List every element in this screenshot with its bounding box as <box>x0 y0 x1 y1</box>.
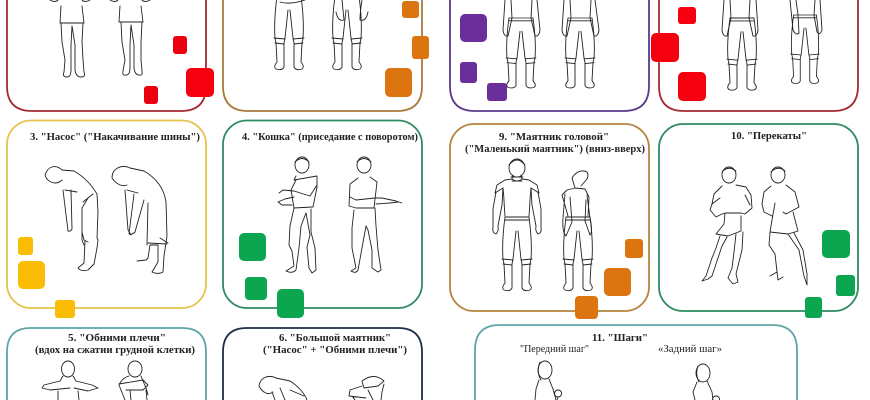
figures: squatting with turn <box>278 157 402 273</box>
decorative squares <box>385 1 429 97</box>
heading: exercise 6: 6. "Большой маятник" <box>279 333 391 344</box>
panel: second top exercise (tan) <box>223 0 429 111</box>
figures: standing men <box>503 0 599 88</box>
figures: bending hug <box>259 376 384 400</box>
decorative squares <box>239 233 304 318</box>
heading: exercise 9 <box>465 132 645 155</box>
figures: standing legs <box>274 0 368 70</box>
panel: exercise 3 pump <box>7 120 206 318</box>
heading: exercise 5: 5. "Обними плечи" <box>68 333 166 344</box>
panel: exercise 11 steps <box>475 325 797 400</box>
panel: exercise 5 hug shoulders <box>7 328 206 400</box>
panel: third top exercise (purple) <box>450 0 649 111</box>
heading: exercise 6 <box>263 333 408 356</box>
heading: exercise 4: 4. "Кошка" (приседание с поворотом) <box>242 132 418 143</box>
heading: exercise 6: ("Насос" + "Обними плечи") <box>263 345 408 356</box>
figures: bent forward men <box>45 166 168 274</box>
figures: rolls <box>702 167 807 285</box>
decorative squares <box>575 239 643 319</box>
heading: exercise 5: (вдох на сжатии грудной клетки) <box>35 345 196 356</box>
heading: exercise 9: ("Маленький маятник") (вниз-вверх) <box>465 144 645 155</box>
figures: head tilt <box>493 159 593 291</box>
label: back step: «Задний шаг» <box>658 344 722 355</box>
panel: fourth top exercise (red) <box>651 0 858 111</box>
decorative squares <box>144 36 214 104</box>
heading: exercise 5 <box>35 333 196 356</box>
decorative squares <box>651 7 706 101</box>
panel: exercise 9 head pendulum <box>450 124 649 319</box>
figures: legs in shorts <box>50 0 150 77</box>
figures: standing men <box>722 0 822 90</box>
heading: exercise 10: 10. "Перекаты" <box>731 131 807 142</box>
panel: top-left exercise (red) <box>7 0 214 111</box>
heading: exercise 3: 3. "Насос" ("Накачивание шины") <box>30 132 200 143</box>
decorative squares <box>460 14 507 101</box>
panel: exercise 6 big pendulum <box>223 328 422 400</box>
heading: exercise 11: 11. "Шаги" <box>592 333 648 344</box>
panel: exercise 10 rolls <box>659 124 858 318</box>
decorative squares <box>18 237 75 318</box>
figures: arms folding <box>42 361 148 400</box>
decorative squares <box>805 230 855 318</box>
label: front step: "Передний шаг" <box>520 344 589 355</box>
heading: exercise 9: 9. "Маятник головой" <box>499 132 609 143</box>
panel: exercise 4 cat <box>223 120 422 318</box>
figures: stepping <box>535 361 720 400</box>
